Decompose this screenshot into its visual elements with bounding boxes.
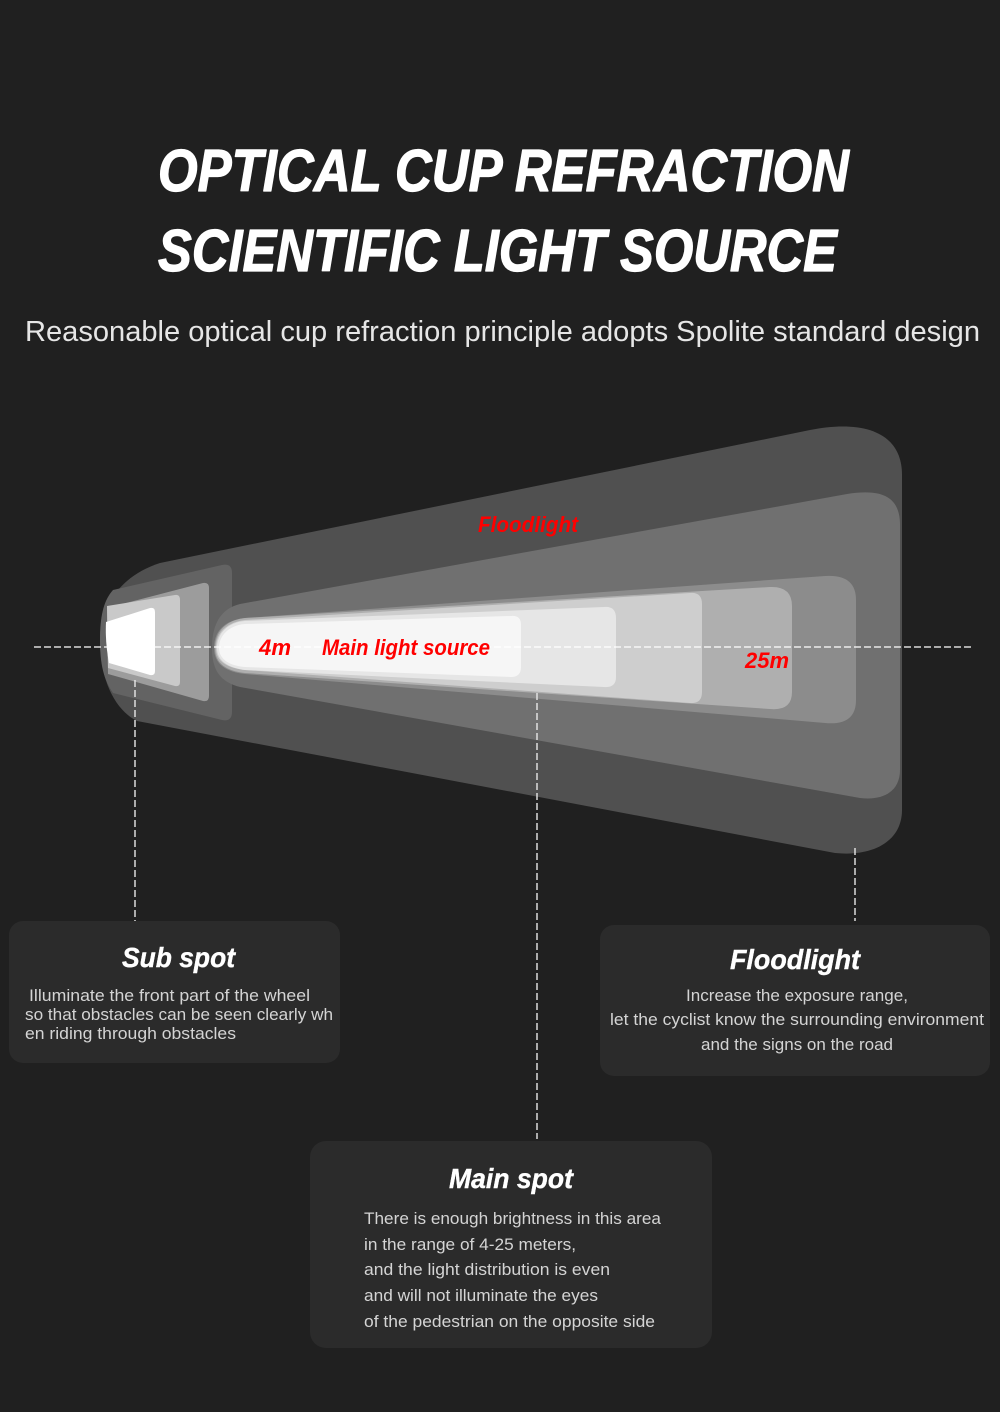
body: floodlight: let the cyclist know the surrounding environment <box>610 1010 984 1029</box>
sub spot outer layer <box>100 565 232 720</box>
callout line: sub spot <box>134 680 136 921</box>
body: main spot: and the light distribution is even <box>364 1260 610 1279</box>
panel: floodlight <box>600 925 990 1076</box>
axis dashed line <box>34 646 971 648</box>
panel: main spot <box>310 1141 712 1348</box>
title: OPTICAL CUP REFRACTION <box>158 138 850 204</box>
sub spot layer 2 <box>107 583 209 701</box>
body: sub spot: en riding through obstacles <box>25 1024 236 1043</box>
heading: sub spot: Sub spot <box>122 942 237 973</box>
subtitle: Reasonable optical cup refraction principle adopts Spolite standard design <box>25 316 980 348</box>
heading: main spot: Main spot <box>449 1163 575 1194</box>
label: floodlight: Floodlight <box>478 512 580 537</box>
label: 25m: 25m <box>744 648 789 673</box>
body: main spot <box>364 1209 662 1331</box>
body: main spot: of the pedestrian on the opposite side <box>364 1312 655 1331</box>
inner floodlight beam <box>212 492 900 798</box>
sub spot core <box>106 608 155 675</box>
main beam layer 856 <box>214 576 856 723</box>
main beam layer 521 <box>219 616 521 677</box>
body: main spot: and will not illuminate the eyes <box>364 1286 598 1305</box>
main beam layer 792 <box>215 587 792 709</box>
body: main spot: There is enough brightness in this area <box>364 1209 662 1228</box>
callout line: floodlight <box>854 848 856 921</box>
light beam diagram <box>100 426 902 854</box>
body: floodlight: and the signs on the road <box>701 1035 893 1054</box>
callout line: main spot <box>536 693 538 1139</box>
title: SCIENTIFIC LIGHT SOURCE <box>158 218 838 284</box>
main beam layer 616 <box>217 607 616 687</box>
body: sub spot: Illuminate the front part of the wheel <box>29 986 310 1005</box>
title <box>158 138 850 284</box>
body: sub spot: so that obstacles can be seen clearly wh <box>25 1005 333 1024</box>
body: floodlight <box>610 986 984 1054</box>
body: main spot: in the range of 4-25 meters, <box>364 1235 576 1254</box>
heading: floodlight: Floodlight <box>730 944 862 975</box>
main beam layer 702 <box>216 593 702 703</box>
panel: sub spot <box>9 921 340 1063</box>
body: floodlight: Increase the exposure range, <box>686 986 908 1005</box>
outer floodlight beam <box>100 426 902 854</box>
label: 4m: 4m <box>258 635 291 660</box>
label: main light source: Main light source <box>322 635 490 660</box>
body: sub spot <box>25 986 333 1043</box>
sub spot layer 3 <box>107 595 180 686</box>
